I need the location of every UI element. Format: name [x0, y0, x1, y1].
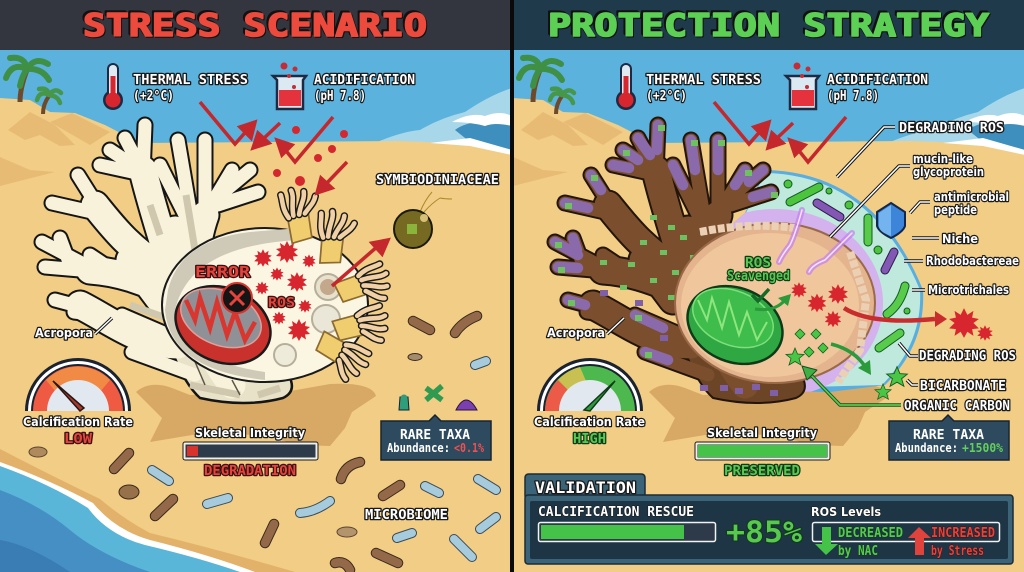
- icon: beaker: [273, 62, 306, 109]
- label: acidification: ACIDIFICATION: [827, 73, 928, 88]
- labels: microbiome annotations: mucin-like: [913, 152, 973, 166]
- icon: thermometer: [103, 63, 123, 110]
- label: calcification rate: Calcification Rate: [23, 415, 133, 429]
- tissue: healthy cell: [675, 223, 875, 383]
- label: acropora: [547, 318, 624, 340]
- mitochondrion: damaged: [164, 272, 282, 378]
- beach background: stress: [0, 50, 512, 572]
- label: degradation: DEGRADATION: [204, 464, 296, 479]
- icon: palm trees: [6, 58, 61, 114]
- label: thermal stress: THERMAL STRESS: [646, 73, 761, 88]
- ros particles: [791, 282, 993, 341]
- mitochondrion: healthy: [676, 272, 794, 378]
- label: error: ERROR: [195, 263, 251, 281]
- bicarbonate particles: [786, 329, 907, 399]
- callout: rare taxa: RARE TAXA: [913, 428, 984, 443]
- niche microbes: [784, 180, 910, 348]
- arrows: stress inputs: [714, 102, 846, 162]
- beach background: protection: [513, 50, 1024, 572]
- label: decreased by nac: by NAC: [838, 544, 878, 559]
- labels: microbiome annotations: BICARBONATE: [920, 379, 1006, 394]
- label: validation: VALIDATION: [535, 478, 636, 497]
- label: acropora: Acropora: [547, 326, 605, 340]
- divider: [510, 0, 514, 572]
- label: decreased by nac: [838, 526, 903, 559]
- label: thermal stress: [133, 73, 248, 104]
- arrow: bicarbonate: [831, 344, 871, 375]
- label: ros scavenged: ROS: [745, 256, 771, 271]
- mucin wisps: [779, 210, 852, 272]
- header bar: protection: [514, 0, 1024, 50]
- header bar: stress: [0, 0, 510, 50]
- callout: rare taxa: +1500%: [962, 441, 1004, 455]
- label: ros scavenged: [727, 256, 790, 284]
- labels: microbiome annotations: [899, 121, 1019, 414]
- validation inner: [530, 501, 1008, 559]
- label: acropora: [35, 318, 112, 340]
- label: thermal stress: (+2°C): [646, 89, 687, 104]
- icon: check mark: [752, 289, 769, 301]
- label: symbiodiniaceae: SYMBIODINIACEAE: [376, 173, 499, 188]
- ros particles: [254, 241, 316, 341]
- label: microbiome: MICROBIOME: [365, 508, 448, 523]
- bar: calcification rescue: [538, 522, 716, 542]
- label: increased by stress: by Stress: [931, 544, 984, 559]
- callout: rare taxa: Abundance:: [387, 441, 450, 455]
- label: thermal stress: THERMAL STRESS: [133, 73, 248, 88]
- bar: skeletal integrity low: [183, 442, 318, 460]
- label: acidification: ACIDIFICATION: [314, 73, 415, 88]
- labels: microbiome annotations: peptide: [934, 203, 977, 217]
- label: acidification: [314, 73, 415, 104]
- niche: microbial dome: [699, 170, 924, 392]
- leader lines: [802, 127, 939, 405]
- polyps: [281, 190, 390, 383]
- panel: stress scenario: [0, 0, 512, 572]
- labels: microbiome annotations: Niche: [942, 232, 978, 246]
- label: ros: ROS: [268, 296, 295, 311]
- label: thermal stress: (+2°C): [133, 89, 174, 104]
- label: ros levels: ROS Levels: [811, 505, 881, 519]
- label: preserved: PRESERVED: [724, 464, 800, 479]
- label: ros scavenged: Scavenged: [727, 269, 790, 284]
- label: acidification: [827, 73, 928, 104]
- heading: protection strategy: PROTECTION STRATEGY: [548, 8, 989, 44]
- arrow: decreased: [815, 527, 838, 555]
- label: calcification rescue: CALCIFICATION RESCUE: [538, 505, 694, 520]
- stain under coral: [136, 384, 376, 446]
- rare taxa microbes: [399, 386, 477, 410]
- coral: bleached acropora: [42, 125, 300, 403]
- stain under coral: [649, 384, 889, 446]
- icon: beaker: [786, 62, 819, 109]
- icon: symbiodiniaceae cell: [394, 192, 452, 248]
- labels: microbiome annotations: Microtrichales: [928, 283, 1009, 297]
- label: decreased by nac: DECREASED: [838, 526, 903, 541]
- arrow: increased: [908, 527, 931, 555]
- validation frame: [525, 495, 1013, 564]
- gauge: calcification low: [25, 358, 131, 411]
- labels: microbiome annotations: antimicrobial: [934, 190, 1009, 204]
- label: increased by stress: [931, 526, 995, 559]
- panel: validation: [525, 474, 1013, 564]
- bar: skeletal integrity high: [695, 442, 830, 460]
- callout: rare taxa: Abundance:: [895, 441, 958, 455]
- icon: palm trees: [519, 58, 574, 114]
- icon: thermometer: [616, 63, 636, 110]
- labels: microbiome annotations: ORGANIC CARBON: [904, 399, 1010, 414]
- icon: error x: [222, 283, 252, 313]
- label: increased by stress: INCREASED: [931, 526, 995, 541]
- label: skeletal integrity: Skeletal Integrity: [195, 426, 305, 440]
- label: skeletal integrity: Skeletal Integrity: [707, 426, 817, 440]
- arrows: stress inputs: [200, 102, 388, 286]
- callout: rare taxa: RARE TAXA: [400, 428, 470, 443]
- label: acropora: Acropora: [35, 326, 93, 340]
- stat: +85%: +85%: [726, 515, 803, 549]
- callout: rare taxa: [381, 415, 491, 460]
- callout: rare taxa: [889, 415, 1009, 460]
- box: ros levels: [812, 522, 1000, 542]
- validation tab: [525, 474, 645, 496]
- callout: rare taxa: <0.1%: [454, 441, 485, 455]
- heading: stress scenario: STRESS SCENARIO: [83, 8, 427, 44]
- acid droplets: [273, 126, 348, 186]
- cell: bleached tissue: [162, 228, 368, 382]
- labels: microbiome annotations: DEGRADING ROS: [919, 349, 1016, 364]
- panel: protection strategy: [513, 0, 1024, 572]
- label: thermal stress: [646, 73, 761, 104]
- microbiome bacteria: [29, 316, 496, 570]
- label: low: LOW: [64, 432, 92, 447]
- icon: antimicrobial shield: [877, 203, 905, 238]
- label: acidification: (pH 7.8): [314, 89, 366, 104]
- coral: healthy acropora: [555, 125, 813, 403]
- arrow: ros export: [844, 308, 947, 327]
- labels: microbiome annotations: glycoprotein: [913, 165, 984, 179]
- labels: microbiome annotations: DEGRADING ROS: [899, 121, 1004, 136]
- label: acidification: (pH 7.8): [827, 89, 879, 104]
- gauge: calcification high: [537, 358, 643, 411]
- label: calcification rate: Calcification Rate: [534, 415, 645, 429]
- label: high: HIGH: [573, 432, 606, 447]
- arrow: scavenge: [755, 294, 791, 310]
